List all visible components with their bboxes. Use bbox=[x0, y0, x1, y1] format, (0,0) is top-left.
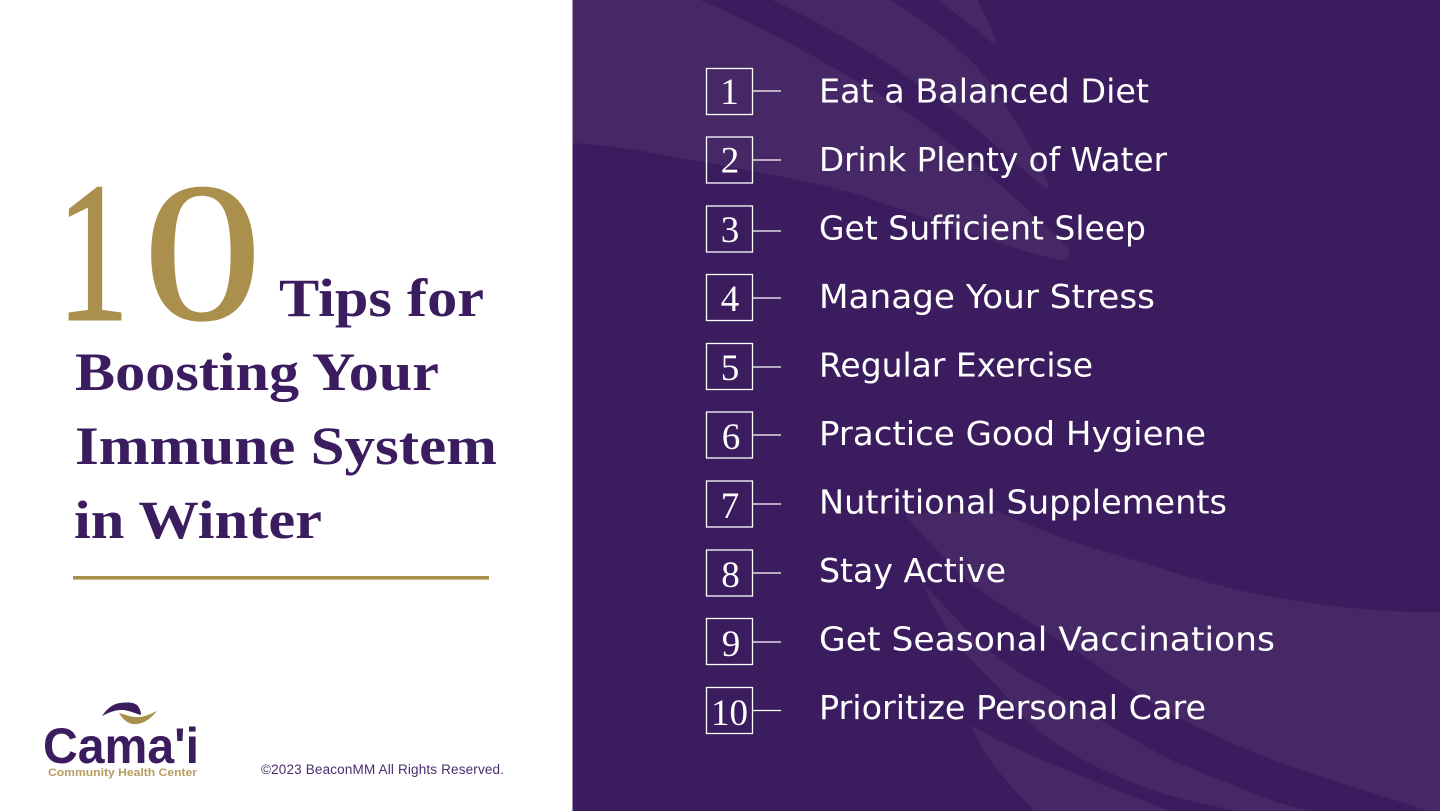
heading line: Immune System: Immune System bbox=[75, 416, 497, 476]
tip 6: Practice Good Hygiene bbox=[819, 414, 1206, 453]
big number 10: 0 bbox=[143, 143, 262, 362]
heading line: in Winter: in Winter bbox=[74, 490, 322, 550]
tip 6: 6 bbox=[722, 417, 740, 458]
tip 2 bbox=[706, 137, 1167, 183]
tip 9: 9 bbox=[722, 624, 740, 665]
tip 10: 10 bbox=[711, 693, 748, 734]
heading line: Tips for: Tips for bbox=[279, 268, 484, 328]
tip 4 bbox=[706, 274, 1155, 320]
tip 9: Get Seasonal Vaccinations bbox=[819, 620, 1275, 658]
tip 7 bbox=[706, 481, 1227, 527]
panel: left white background bbox=[0, 0, 573, 811]
tip 7: 7 bbox=[721, 486, 739, 527]
gold divider under title bbox=[73, 576, 489, 580]
logo tagline: Community Health Center bbox=[48, 767, 198, 779]
tip 10 bbox=[706, 688, 1206, 734]
tip 1: 1 bbox=[720, 72, 739, 113]
heading line: Boosting Your: Boosting Your bbox=[75, 342, 439, 402]
tip 1 bbox=[706, 68, 1149, 114]
tip 7: Nutritional Supplements bbox=[819, 482, 1227, 522]
title bbox=[57, 143, 497, 550]
tip 6 bbox=[706, 412, 1206, 458]
tip 2: 2 bbox=[721, 140, 739, 182]
tip 5: Regular Exercise bbox=[819, 346, 1093, 384]
logo: Cama'i Community Health Center bbox=[43, 702, 199, 779]
tip 3 bbox=[706, 206, 1146, 252]
icon: purple swoosh bbox=[102, 702, 141, 716]
tip 10: Prioritize Personal Care bbox=[819, 688, 1206, 727]
tip 4: Manage Your Stress bbox=[819, 277, 1155, 316]
big number 10 bbox=[57, 143, 262, 362]
icon: gold swoosh bbox=[119, 711, 157, 724]
tip 8: 8 bbox=[721, 555, 740, 596]
copyright notice: ©2023 BeaconMM All Rights Reserved. bbox=[261, 762, 504, 777]
logo wordmark: Cama'i bbox=[43, 718, 199, 774]
tip 8: Stay Active bbox=[819, 551, 1006, 590]
tip 2: Drink Plenty of Water bbox=[819, 140, 1167, 179]
tip 5: 5 bbox=[721, 348, 739, 389]
tip 3: Get Sufficient Sleep bbox=[819, 208, 1146, 248]
big number 10: 1 bbox=[57, 143, 129, 362]
tip 3: 3 bbox=[721, 210, 739, 251]
tip 5 bbox=[706, 344, 1093, 390]
tip 4: 4 bbox=[721, 279, 739, 320]
tip 8 bbox=[706, 550, 1006, 596]
list: ten tips bbox=[706, 68, 1275, 734]
tip 9 bbox=[706, 618, 1275, 665]
tip 1: Eat a Balanced Diet bbox=[819, 72, 1149, 110]
panel: right purple background with swooshes bbox=[572, 0, 1440, 811]
